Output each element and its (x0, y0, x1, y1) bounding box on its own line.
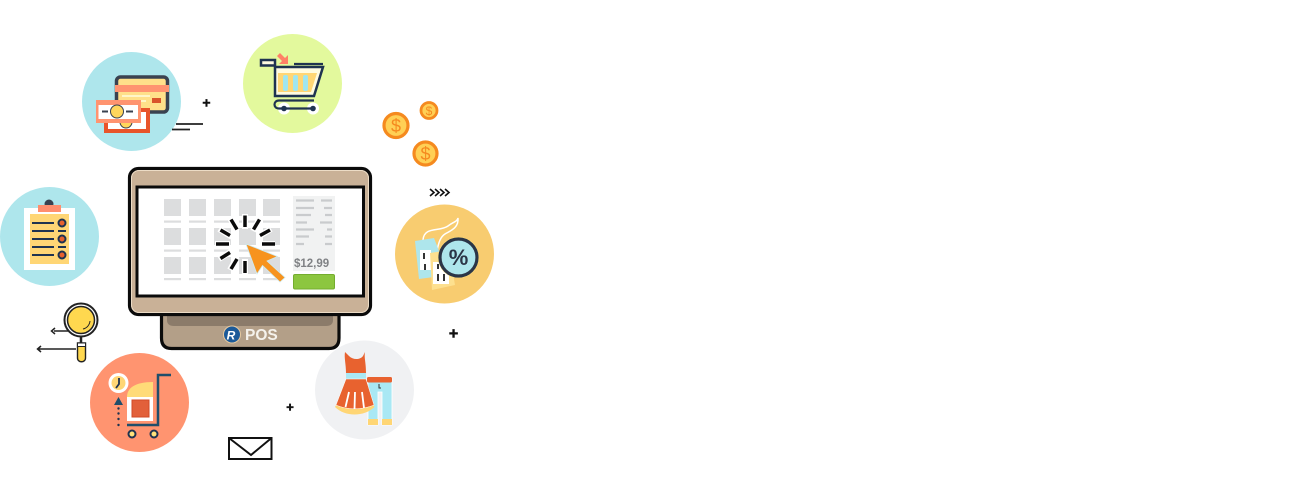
icon: magnifying glass with arrows (38, 304, 98, 362)
loading spinner (215, 214, 275, 274)
monitor stand with logo: R (227, 328, 236, 342)
monitor frame (130, 168, 370, 314)
icon: cash and credit card (82, 52, 181, 151)
icon: delivery trolley with clock (90, 353, 189, 452)
icon: clipboard checklist (0, 187, 99, 286)
icon: gold coins (384, 102, 437, 165)
green pay button (294, 274, 334, 289)
receipt: $12,99 (294, 258, 329, 270)
icon: dress and trousers (315, 340, 414, 440)
monitor stand with logo (162, 310, 339, 348)
screen (137, 187, 364, 296)
plus sign: + (202, 94, 211, 110)
receipt (293, 196, 335, 271)
decorative motion lines (172, 124, 203, 130)
icon: gold coins: $ (426, 104, 433, 118)
icon: shopping cart (243, 34, 342, 133)
plus sign: + (449, 326, 458, 342)
icon: envelope (229, 438, 272, 459)
POS terminal (130, 168, 370, 348)
icon: discount price tags (395, 204, 494, 304)
icon: chevron arrows (430, 189, 449, 196)
monitor stand with logo: POS (245, 327, 278, 344)
cursor arrow (246, 244, 285, 282)
icon: discount price tags: % (449, 245, 468, 270)
product grid (164, 199, 280, 280)
icon: gold coins: $ (391, 116, 401, 136)
plus sign: + (286, 400, 294, 414)
icon: gold coins: $ (420, 144, 431, 164)
